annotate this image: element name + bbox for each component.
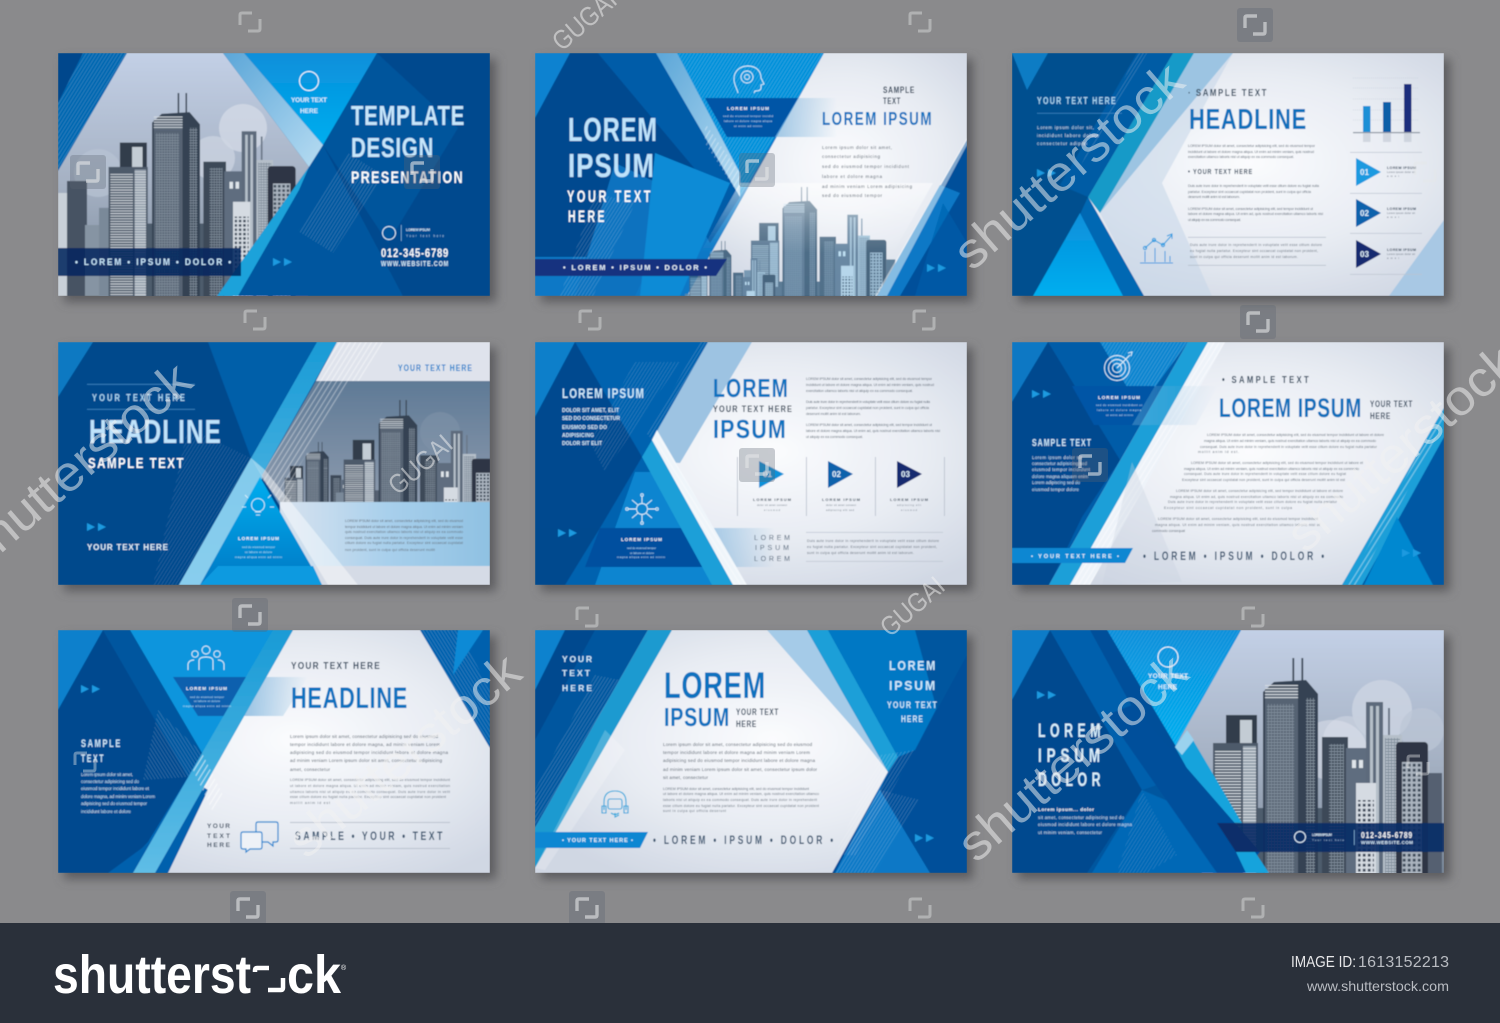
contact block: LOREM IPSUM [1312,833,1332,837]
bottom note: eu fugiat nulla pariatur. Excepteur sint occaecat cupidatat non proident, [807,545,937,549]
title: YOUR TEXT [736,707,779,718]
slanted body text: commodo consequat [1152,529,1185,533]
skyline [99,93,308,312]
main text block: incididunt ut labore et dolore magna aliqua. Ut enim ad minim veniam, quis nostrud [1188,150,1314,154]
left text: adipisicing sed do eiusmod tempor [81,801,148,806]
title: LOREM [664,665,766,706]
left text: Lorem adipiscing sed do [1032,480,1081,485]
icon: play arrows [927,264,946,272]
callout: sed do eiusmod tempor [627,546,656,550]
icon: play arrows [1032,390,1051,398]
bottom label: TEXT [207,833,230,840]
callout [617,537,666,559]
icon: play arrows [1037,691,1056,699]
title: PRESENTATION [351,168,464,187]
callout triangle [200,477,322,585]
right label: HERE [901,714,924,724]
callout [1096,395,1142,417]
item list: 03 [1360,250,1369,259]
body text: LOREM IPSUM dolor sit amet, consectetur adipisicing elit, sed tempor incididunt ut [806,423,932,427]
slanted body text [1152,433,1384,533]
left text: eiusmod incididunt labore et dolore magna [1038,822,1133,827]
slanted body text: LOREM IPSUM dolor sit amet, consectetur adipisicing elit, sed tempor incididunt ut labore et dolore [1176,489,1343,493]
body text: labore et dolore magna aliqua. Ut enim ad, quis nostrud exercitation ullamco laboris nisi [806,429,940,433]
main text: ad minim veniam Lorem ipsum dolor sit amet, consectetur adipisicing [290,758,442,763]
icon: network [626,494,658,524]
badge: lorem ipsum: labore et dolore magna aliqua [724,119,772,123]
left text block: DOLOR SIT ELIT [562,441,602,447]
left text block: SED DO CONSECTETUR [562,416,620,422]
headline: YOUR TEXT [1370,399,1413,410]
icon: play arrows [1402,549,1421,557]
strip text: cillum dolore eu fugiat nulla pariatur. Excepteur sint occaecat cupidatat [345,541,463,545]
panel: lorem ipsum with target [1012,342,1450,591]
left text block: Lorem ipsum dolor sit, [1037,125,1094,130]
contact block: Your text here [1312,838,1344,842]
badge: lorem ipsum: sed do eiusmod tempor incidid [723,114,773,118]
callout triangle: sed do eiusmod tempor [242,545,275,549]
right label [887,658,938,724]
steps: dolor sit amet consect [757,503,787,507]
left text: SAMPLE [81,738,122,750]
item list: 02 [1360,209,1369,218]
main text block: sunt in culpa qui officia deserunt mollit anim id est laborum. [1190,255,1298,259]
main text: tempor incididunt labore et dolore magna, ad minim veniam Lorem [290,742,440,747]
slanted body text: Excepteur sint occaecat cupidatat non proident, sunt in culpa qui officia deserunt mollit anim id est [1182,478,1345,482]
badge: lorem ipsum: ut enim ad minim [734,124,762,128]
left text: dolore magna aliquam enim [1032,474,1088,479]
main text block: pariatur. Excepteur sint occaecat cupidatat non proident, sunt in culpa qui officia [1188,190,1311,194]
panel: headline with bar chart [1012,53,1450,302]
main text: ut labore et dolore magna aliqua. Ut enim ad minim veniam, quis nostrud exercitation [290,784,450,788]
title: HEADLINE [89,413,222,450]
steps: dolor sit amet consect [826,503,856,507]
left text: eiusmod tempor incididunt labore et [81,786,150,791]
item list: amet [1387,174,1399,178]
slogan: SAMPLE • YOUR • TEXT [295,829,445,843]
body text: adipisicing sed do eiusmod tempor incididunt labore et dolore magna [663,758,815,763]
headline: HERE [1370,411,1391,422]
right text block: SAMPLE [883,85,915,96]
contact block: LOREM IPSUM [406,228,430,232]
slanted body text: LOREM IPSUM dolor sit amet, consectetur adipisicing elit, sed do eiusmod tempor incididunt [1158,517,1318,521]
main text: ullamco laboris nisi ut aliquip ex ea commodo consequat. Duis aute irure dolor in velit [290,790,450,794]
slanted body text: Excepteur sint occaecat cupidatat non proident, sunt in culpa [1164,506,1292,510]
contact block: 012-345-6789 [1361,831,1413,840]
main text: adipisicing sed do eiusmod tempor incididunt labore et dolore magna [290,750,448,755]
steps: 03 [901,470,910,479]
body text [806,377,940,439]
body text: esse cillum dolore eu fugiat nulla pariatur. Excepteur sint occaecat cupidatat non proident [663,804,819,808]
bottom note: sunt in culpa qui officia deserunt mollit anim id est laborum. [807,551,914,555]
main text block: ut aliquip ex ea commodo consequat. [1188,218,1241,222]
callout: sed do eiusmod tempor [190,695,224,699]
bottom note: LOREM [754,535,790,542]
steps: adipiscing elit sed [826,508,855,512]
callout: ut enim ad minim [1106,413,1134,417]
footer bar [0,923,1500,1023]
bottom label: YOUR [207,823,230,830]
panel: city cover lorem ipsum dolor [1012,630,1450,910]
item list: Lorem ipsum dolor sit [1387,211,1415,215]
city photo [261,381,490,502]
badge: lorem ipsum: LOREM IPSUM [727,106,769,111]
image id [1291,954,1449,994]
contact block [381,225,449,268]
bottom tab [1012,548,1133,563]
steps: LOREM IPSUM [822,497,861,502]
main text: YOUR TEXT HERE [291,661,381,672]
callout: magna aliqua enim ad minim [617,555,666,559]
contact block: Your text here [406,234,444,238]
main text block: labore et dolore magna aliqua. Ut enim ad, quis nostrud exercitation ullamco laboris nisi [1188,212,1323,216]
watermark: shutterstock logos and stamps: shutterstock [942,50,1195,280]
panel: city cover lorem ipsum dolor: HERE [1158,684,1178,691]
panel: lorem ipsum with light city [535,53,978,306]
right text block: TEXT [883,96,901,107]
left text: TEXT [81,753,105,765]
title [351,100,465,187]
callout: LOREM IPSUM [186,686,227,691]
title: IPSUM [568,147,655,184]
callout: labore et dolore magna [1097,408,1141,412]
contact block: 012-345-6789 [381,246,449,260]
left text block: consectetur adipisi [1037,141,1087,146]
steps: LOREM IPSUM [753,497,792,502]
bottom label: HERE [207,842,231,849]
item list: LOREM IPSUM [1387,207,1416,211]
body text: Lorem ipsum dolor sit amet, consectetur adipisicing sed do eiusmod [663,742,812,747]
icon: head with gear [734,66,764,93]
bottom bar [535,259,727,276]
panel: headline with city strip [58,342,504,591]
panel: cover with city, template design: • LOREM • IPSUM • DOLOR • [75,257,233,267]
left text: Lorem ipsum... dolor [1038,807,1094,813]
callout: ut labore et dolore [194,699,220,703]
slogan: • LOREM • IPSUM • DOLOR • [653,833,836,847]
slanted body text: magna aliqua. Ut enim ad minim veniam, quis nostrud exercitation ullamco laboris nisi ut [1155,523,1320,527]
main text block: exercitation ullamco laboris nisi ut aliquip ex ea commodo consequat. [1188,155,1294,159]
slanted body text: magna aliqua. Ut enim ad minim veniam, quis nostrud exercitation ullamco laboris nisi ut aliquip ex ea commodo [1204,439,1376,443]
right label: IPSUM [889,678,937,693]
panel: lorem ipsum with numbered steps [535,342,973,591]
watermark: shutterstock logos and stamps: shutterstock [946,642,1199,872]
main text: Lorem ipsum dolor sit amet, consectetur adipisicing sed do eiusmod [290,734,438,739]
main text block [1188,88,1326,266]
panel: lorem ipsum centered trapezoid [535,630,973,879]
icon: team [188,646,224,670]
item list: LOREM IPSUM [1387,248,1416,252]
steps: 02 [832,470,841,479]
info strip [280,502,490,566]
left text: Lorem ipsum dolor sit amet, [81,772,133,777]
slanted body text: LOREM IPSUM dolor sit amet, consectetur adipisicing elit, sed do eiusmod tempor incididunt ut labore et [1191,461,1363,465]
title: DESIGN [351,132,434,163]
bottom label [207,823,231,849]
title [1038,721,1105,791]
strip text: consequat. Duis aute irure dolor in reprehenderit in voluptate velit esse [345,536,463,540]
body text: ad minim veniam Lorem ipsum dolor sit amet, consectetur ipsum dolor [663,767,817,772]
steps: LOREM IPSUM [890,497,929,502]
skyline [1202,658,1442,910]
footer logo: shutterst [53,945,251,1005]
bottom tab: • YOUR TEXT HERE • [562,838,633,844]
left text block: YOUR TEXT HERE [1037,95,1117,107]
icon: play arrows [87,523,106,531]
panel: headline with team [58,630,496,879]
title: SAMPLE TEXT [88,455,185,472]
body text: LOREM IPSUM dolor sit amet, consectetur adipisicing elit, sed do eiusmod tempor [806,377,933,381]
bottom note: Duis aute irure dolor in reprehenderit in voluptate velit esse cillum dolore [807,539,939,543]
left text block: incididunt labore dolore [1037,133,1100,138]
body text: pariatur. Excepteur sint occaecat cupidatat non proident, sunt in culpa qui officia [806,406,929,410]
right label: YOUR TEXT [887,700,938,710]
main text: LOREM IPSUM dolor sit amet, consectetur adipisicing elit, sed do eiusmod tempor incididunt [290,778,450,782]
slanted body text: magna aliqua. Ut enim ad, quis nostrud exercitation ullamco laboris nisi ut aliquip ex ea commodo [1170,495,1343,499]
body text: sit amet, consectetur [663,775,708,780]
title: YOUR TEXT [567,187,653,206]
strip text: LOREM IPSUM dolor sit amet, consectetur adipisicing elit, sed do eiusmod [345,519,463,523]
watermark: shutterstock logos and stamps: GUGAI [382,429,459,501]
callout: LOREM IPSUM [1098,395,1140,400]
icon: play arrows [915,834,934,842]
left text: incididunt labore et dolore [81,809,132,814]
item list: LOREM IPSUM [1387,166,1416,170]
main text block: LOREM IPSUM dolor sit amet, consectetur adipisicing elit, sed tempor incididunt ut [1188,207,1313,211]
item list: Lorem ipsum dolor sit [1387,170,1415,174]
panel: cover with city, template design [58,53,496,312]
slanted body text: consequat. Duis aute irure dolor in reprehenderit in voluptate velit esse cillum dolore eu fugiat nulla pariatur [1200,445,1378,449]
title [664,665,779,732]
bottom note: LOREM [754,556,790,563]
left text block: ADIPISICING [562,433,594,439]
right text block: LOREM IPSUM [822,109,933,129]
body text: exercitation ullamco laboris nisi ut aliquip ex ea commodo consequat. [806,389,913,393]
title: IPSUM [1038,746,1105,767]
right text block [822,85,933,198]
bar chart [1353,78,1420,142]
headline: • SAMPLE TEXT [1222,375,1311,386]
callout triangle: ut labore et dolore [245,550,272,554]
title [567,111,658,226]
body text: ut aliquip ex ea commodo consequat. [806,435,863,439]
image id: 1613152213 [1358,954,1449,971]
strip text [345,519,463,552]
slanted body text: magna aliqua. Ut enim ad minim veniam, quis nostrud exercitation ullamco laboris nisi ut aliquip ex ea commodo [1184,467,1359,471]
panel: cover with city, template design: YOUR TEXT [291,97,327,104]
bottom tab: • YOUR TEXT HERE • [1031,554,1119,560]
left text: Lorem ipsum dolor sit [1032,455,1083,460]
left text block [1037,95,1122,146]
image id: IMAGE ID: [1291,954,1356,971]
right text block: Lorem ipsum dolor sit amet, [822,145,892,150]
left text block: LOREM IPSUM [562,386,645,401]
steps: eiusmod [764,508,781,512]
skyline [684,186,896,296]
title: HERE [736,719,757,730]
right corner [1342,408,1444,585]
right text block: ad minim veniam Lorem adipisicing [822,184,912,189]
main text block: LOREM IPSUM dolor sit amet, consectetur adipisicing elit, sed do eiusmod tempor [1188,144,1316,148]
title: YOUR TEXT HERE [92,392,187,404]
item list: amet [1387,215,1399,219]
bottom bar [1217,823,1444,852]
bottom tab [535,832,648,848]
body text: LOREM IPSUM dolor sit amet, consectetur adipisicing elit, sed do eiusmod tempor incididunt [663,787,809,791]
steps: eiusmod [901,508,918,512]
slanted body text: LOREM IPSUM dolor sit amet, consectetur adipisicing elit, sed do eiusmod tempor incididunt ut labore et dolore [1207,433,1384,437]
panel: city cover lorem ipsum dolor: YOUR TEXT [1148,673,1188,680]
icon: chat bubbles [241,822,278,852]
bottom note [754,532,943,563]
left text block [562,386,645,447]
left text: eiusmod tempor incididunt [1032,467,1091,472]
title: LOREM [1038,721,1105,742]
body text: sunt in culpa qui officia deserunt [663,809,726,813]
headline: YOUR TEXT HERE [713,404,793,415]
title: IPSUM [664,702,730,732]
left text block: EIUSMOD SED DO [562,425,607,431]
body text: deserunt mollit anim id est laborum. [806,412,861,416]
right text block: labore et dolore magna [822,174,882,179]
left text [81,738,155,814]
icon: play arrows [273,258,292,266]
contact block: WWW.WEBSITE.COM [381,261,449,268]
badge: lorem ipsum [705,98,798,137]
headline [1219,375,1413,423]
right text block: sed do eiusmod tempor [822,193,882,198]
title [87,384,222,472]
main text block: Duis aute irure dolor in reprehenderit in voluptate velit esse cillum dolore eu fugiat nulla [1188,184,1319,188]
left text: consectetur adipisicing sed do [81,779,140,784]
slanted body text: consequat. Duis aute irure dolor in reprehenderit in voluptate velit esse cillum dolore eu fugiat [1184,472,1346,476]
light page area [687,53,967,296]
item list [1350,152,1422,275]
main text: esse cillum dolore eu fugiat nulla pariatur. Excepteur sint occaecat cupidatat non proident [290,795,446,799]
top right label: YOUR TEXT HERE [398,363,473,374]
main text block: • YOUR TEXT HERE [1188,169,1253,176]
title: TEMPLATE [351,100,465,131]
right text block: consectetur adipisicing [822,154,880,159]
footer logo: ck [287,945,342,1005]
left text: sit amet, consectetur adipiscing sed do [1038,815,1125,820]
steps: adipiscing elit [897,503,921,507]
slogan: • LOREM • IPSUM • DOLOR • [1143,549,1327,563]
panel: lorem ipsum with light city: • LOREM • IPSUM • DOLOR • [563,263,707,272]
item list: amet [1387,256,1399,260]
left text: SAMPLE TEXT [1032,438,1092,449]
watermark: shutterstock logos and stamps: GUGAI [874,571,951,643]
left text: eiusmod tempor dolore [1032,487,1080,492]
left text: ut minim veniam, consectetur [1038,830,1103,835]
callout: ut labore et dolore [630,551,654,555]
left label [562,654,592,693]
bottom note: IPSUM [755,545,789,552]
title: DOLOR [1038,770,1105,791]
contact block [1294,830,1413,845]
icon: play arrows [1037,169,1056,177]
left text: dolore magna, ad minim veniam Lorem [81,794,155,799]
main text block: deserunt mollit anim id est laborum. [1188,195,1240,199]
headline [712,378,792,439]
panel: headline with city strip: YOUR TEXT HERE [87,543,169,552]
left label: TEXT [562,668,591,678]
body text: laboris nisi ut aliquip ex ea commodo consequat. Duis aute irure dolor in reprehenderit [663,798,817,802]
strip text: quis nostrud exercitation ullamco laboris nisi ut aliquip ex ea commodo [345,530,463,534]
headline: LOREM [713,373,789,403]
contact block: WWW.WEBSITE.COM [1361,840,1413,845]
main text [290,661,450,805]
body text: tempor incididunt labore et dolore magna ad minim veniam Lorem [663,750,810,755]
panel: cover with city, template design: HERE [300,108,319,115]
icon: headset [602,791,628,817]
image id: www.shutterstock.com [1306,978,1449,994]
watermark: shutterstock logos and stamps: shutterstock [277,642,532,868]
main text: HEADLINE [291,682,408,715]
icon: chart [1140,234,1173,263]
left text [1038,807,1133,835]
callout: LOREM IPSUM [621,537,662,542]
body text: incididunt ut labore et dolore magna aliqua. Ut enim ad minim veniam, quis nostrud [806,383,934,387]
item list: 01 [1360,168,1369,177]
main text block: · SAMPLE TEXT [1188,88,1268,99]
slanted body text: mollit anim id est. [1198,450,1239,454]
left text [1032,438,1092,492]
body text: Duis aute irure dolor in reprehenderit in voluptate velit esse cillum dolore eu fugiat nulla [806,400,930,404]
left label: HERE [562,683,592,693]
main text block: Duis aute irure dolor in reprehenderit in voluptate velit esse cillum dolore [1190,243,1322,247]
strip text: non proident, sunt in culpa qui officia deserunt mollit [345,548,435,552]
main text block: eu fugiat nulla pariatur. Excepteur sint occaecat cupidatat non proident, [1190,249,1318,253]
right label: LOREM [889,658,937,673]
skyline [280,442,380,502]
right text block: sed do eiusmod tempor incididunt [822,164,910,169]
icon: play arrows [81,685,100,693]
icon: target [1104,352,1132,380]
item list: Lorem ipsum dolor sit [1387,252,1415,256]
icon: ring logo [1158,647,1178,667]
left text block: DOLOR SIT AMET, ELIT [562,408,619,414]
icon: play arrows [558,529,577,537]
body text [663,742,819,813]
steps [737,457,945,516]
main text: amet, consectetur [290,767,330,772]
callout: magna aliqua enim ad minim [183,704,232,708]
headline: IPSUM [713,414,787,444]
bottom bar [58,248,241,276]
strip text: tempor incididunt ut labore et dolore magna aliqua. Ut enim ad minim veniam [345,525,463,529]
icon: ring logo [300,72,318,90]
slanted body text: Duis aute irure dolor in reprehenderit in voluptate velit esse cillum dolore eu fugiat nulla pariatur [1168,500,1338,504]
title: HERE [568,207,607,226]
left text: consectetur adipisicing sed [1032,461,1088,466]
footer logo: ® [341,964,347,972]
icon: bulb [242,495,274,515]
callout: sed do eiusmod incididunt ut [1096,403,1142,407]
callout triangle: magna aliqua enim ad minim [235,555,283,559]
main text: mollit anim id est [290,801,330,805]
steps: 01 [763,470,772,479]
main text block: HEADLINE [1189,104,1307,136]
left label: YOUR [562,654,592,664]
title: LOREM [568,111,658,148]
body text: ut labore et dolore magna aliqua. Ut enim ad minim veniam, quis nostrud exercitation ullamco [663,792,819,796]
callout triangle: LOREM IPSUM [238,536,279,541]
callout [183,686,232,708]
headline: LOREM IPSUM [1219,393,1362,423]
